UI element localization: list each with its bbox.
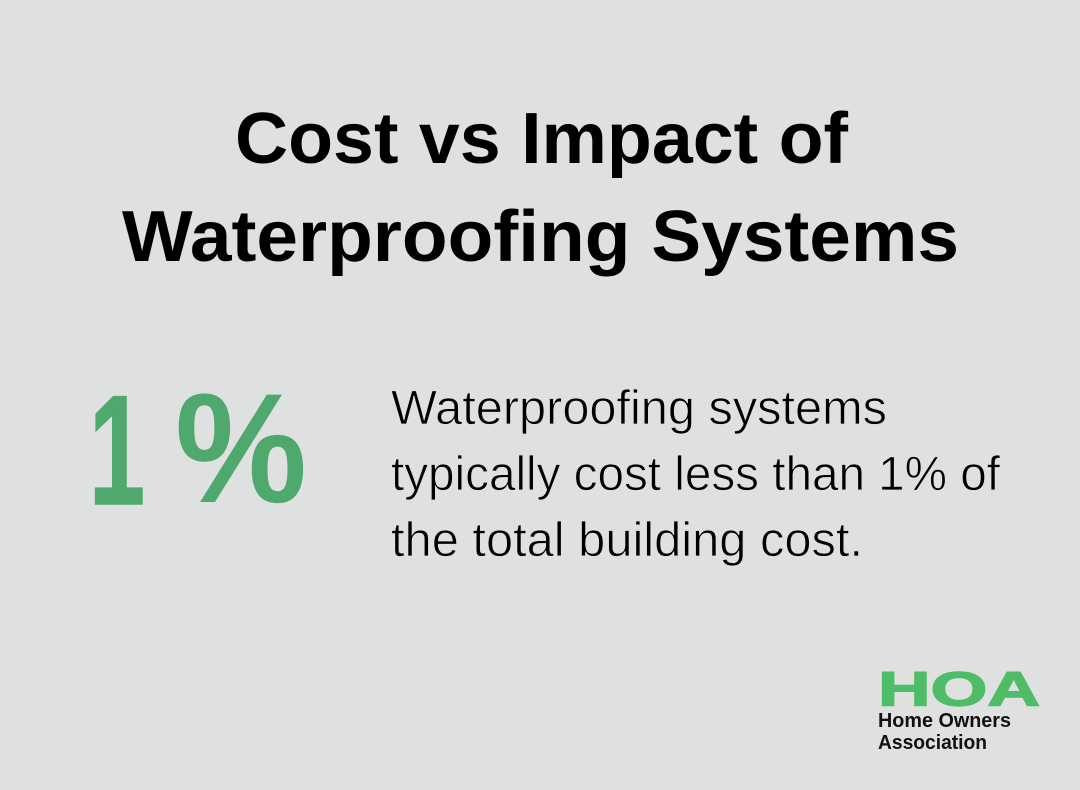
stat description: the total building cost. <box>391 514 863 567</box>
big stat: 1%: 1 <box>89 364 145 538</box>
logo: Home Owners Association <box>878 664 1040 754</box>
title <box>122 99 959 277</box>
logo name: Association <box>878 732 987 754</box>
stat description <box>391 382 1001 567</box>
stat description: Waterproofing systems <box>391 382 887 435</box>
logo name: Home Owners <box>878 710 1011 732</box>
big stat: 1% <box>89 362 307 538</box>
title: Cost vs Impact of <box>235 99 849 179</box>
logo mark: HOA: HOA <box>878 664 1040 716</box>
stat description: typically cost less than 1% of <box>391 448 1001 501</box>
title: Waterproofing Systems <box>122 197 959 277</box>
logo name <box>878 710 1011 754</box>
big stat: 1%: % <box>175 362 307 536</box>
